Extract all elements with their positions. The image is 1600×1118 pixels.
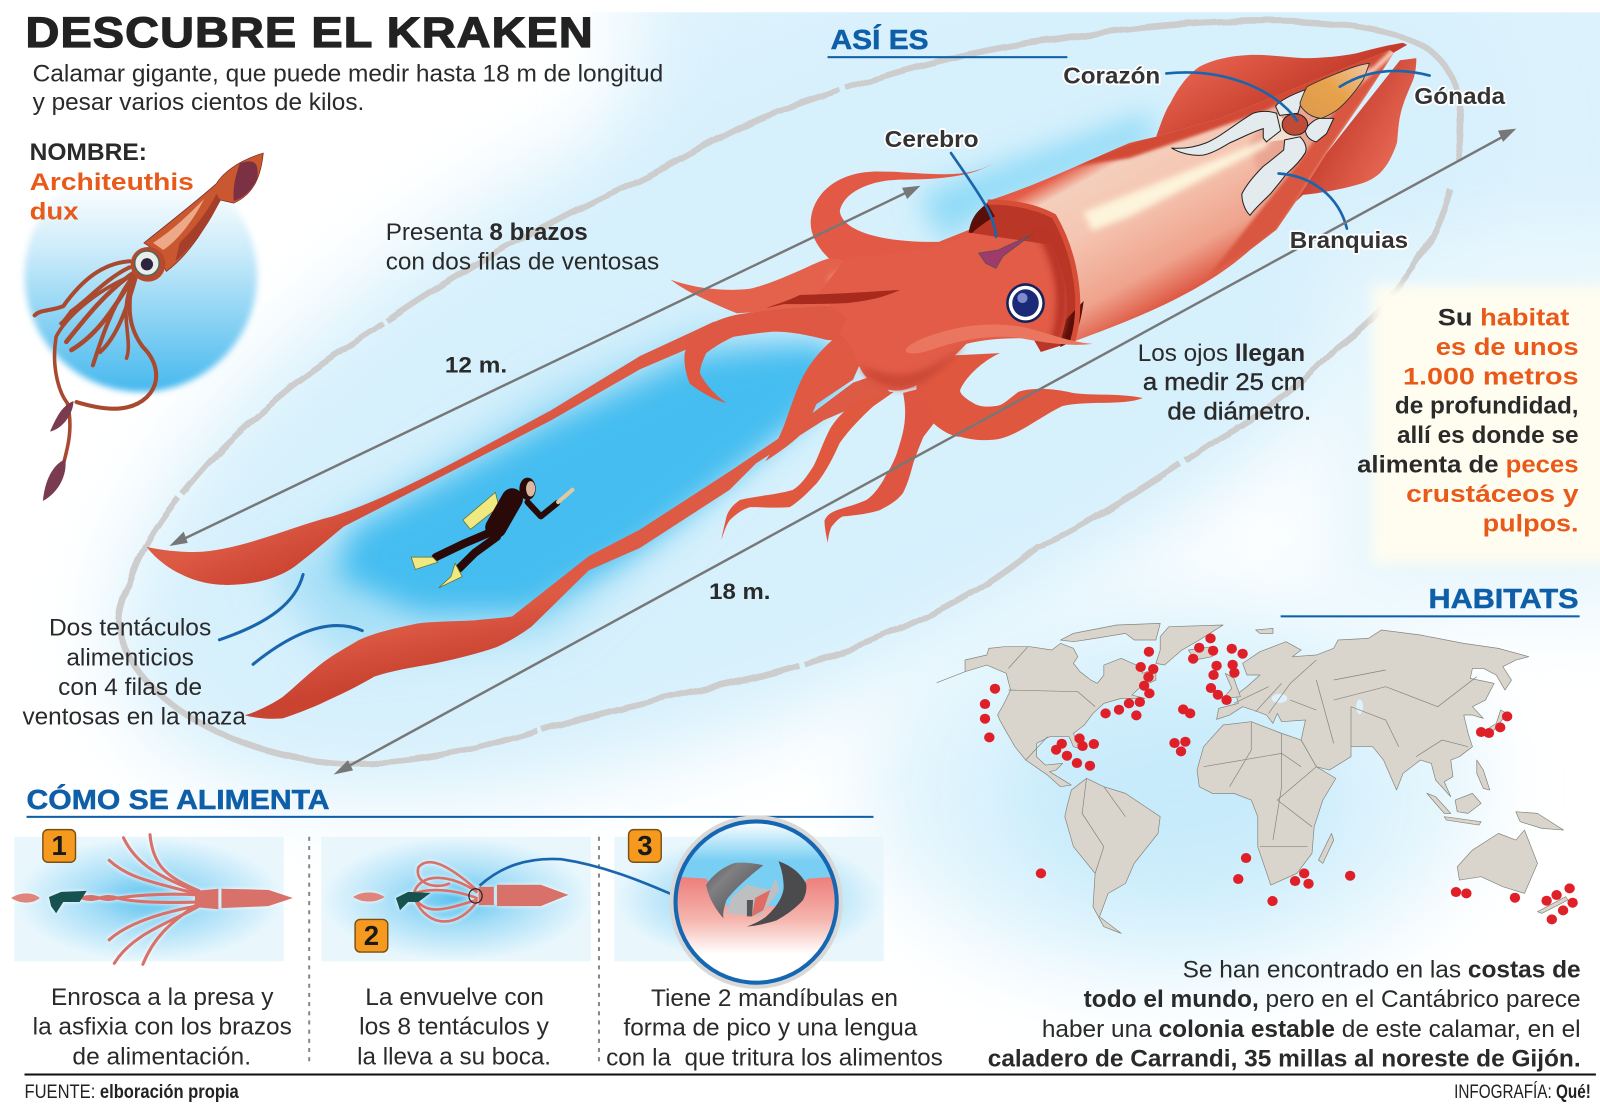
- annotation: arms: [386, 219, 659, 275]
- dotted separators: [309, 837, 599, 1063]
- annotation: eyes: Los ojos llegan: [1138, 340, 1305, 367]
- name block: Architeuthis: [30, 169, 194, 196]
- caption 1: de alimentación.: [72, 1043, 251, 1070]
- annotation: feeding tentacles: [22, 615, 246, 731]
- illustration: small squid: [35, 153, 263, 501]
- habitat text: pulpos.: [1483, 511, 1579, 538]
- annotation: eyes: a medir 25 cm: [1143, 369, 1305, 396]
- badge 2: 2: [364, 920, 379, 951]
- habitat text: Su habitat: [1438, 305, 1569, 332]
- habitat text: alimenta de peces: [1357, 451, 1579, 478]
- world map with sightings: [937, 623, 1578, 933]
- pale box behind habitat text: [1372, 286, 1600, 563]
- mantle cavity: [968, 202, 1077, 352]
- panel 3: background: [614, 837, 884, 961]
- habitat text: allí es donde se: [1397, 422, 1579, 449]
- mantle: [988, 43, 1398, 342]
- caption 1: la asfixia con los brazos: [33, 1014, 292, 1041]
- caption 2: [357, 984, 551, 1070]
- map: inland seas: [1272, 694, 1363, 714]
- caption 3: Tiene 2 mandíbulas en: [651, 985, 898, 1012]
- habitat text: [1357, 305, 1579, 538]
- caption 3: [606, 985, 943, 1071]
- connector to zoom circle: [480, 859, 676, 896]
- panel 2: squid wraps prey: [321, 837, 591, 961]
- arm: below eye: [906, 325, 1093, 353]
- diver: [411, 478, 572, 588]
- panel 1: squid seizes prey: [11, 835, 293, 964]
- brain: [979, 235, 1032, 268]
- measure arrow: 12 m: [169, 186, 920, 546]
- annotation: feeding tentacles: con 4 filas de: [58, 674, 202, 701]
- arm: left pointing: [670, 258, 902, 313]
- mantle highlight: [1084, 129, 1278, 231]
- caption 3: con la que tritura los alimentos: [606, 1044, 943, 1071]
- label: corazón: Corazón: [1063, 63, 1160, 89]
- tentacle: upper with club: [147, 321, 724, 585]
- habitat text: crustáceos y: [1406, 481, 1579, 508]
- caption 1: Enrosca a la presa y: [51, 984, 274, 1011]
- title: DESCUBRE EL KRAKEN: [26, 9, 594, 57]
- name block: NOMBRE:: [30, 139, 147, 166]
- badge 2: [355, 919, 388, 952]
- zoom circle: mandibles: [672, 816, 841, 990]
- annotation: eyes: de diámetro.: [1167, 398, 1311, 425]
- head: [816, 233, 1067, 391]
- heart: [1282, 114, 1308, 135]
- badge 1: [43, 830, 76, 862]
- habitat description: todo el mundo, pero en el Cantábrico parece: [1084, 986, 1581, 1013]
- caption 2: La envuelve con: [365, 984, 544, 1011]
- label: branquias: Branquias: [1290, 227, 1408, 253]
- map: country borders: [1008, 647, 1477, 873]
- mantle rim: [988, 202, 1078, 342]
- fins: [1156, 43, 1416, 209]
- gills: [1171, 90, 1334, 215]
- eye: [1006, 283, 1045, 323]
- annotation: feeding tentacles: alimenticios: [66, 644, 194, 671]
- measure arrow: 18 m: [334, 129, 1516, 775]
- annotation: feeding tentacles: Dos tentáculos: [49, 615, 211, 642]
- blue circle behind small squid: [24, 159, 257, 392]
- arm: curling upward: [811, 163, 993, 291]
- annotation: arms: Presenta 8 brazos: [386, 219, 588, 246]
- arm: right low: [916, 353, 1143, 440]
- name block: [30, 139, 194, 225]
- arm fold: dark crease: [766, 290, 900, 308]
- habitat description: [988, 957, 1581, 1072]
- intro text: y pesar varios cientos de kilos.: [33, 89, 364, 116]
- tentacle: lower with club: [245, 376, 890, 719]
- heading: así es: ASÍ ES: [831, 24, 929, 55]
- label: cerebro: Cerebro: [885, 126, 979, 152]
- annotation: feeding tentacles: ventosas en la maza: [22, 704, 246, 731]
- arm highlight: [829, 270, 878, 289]
- name block: dux: [30, 198, 79, 225]
- habitat description: caladero de Carrandi, 35 millas al noreste de Gijón.: [988, 1045, 1581, 1072]
- source credit: FUENTE: elboración propia: [24, 1081, 239, 1103]
- habitat text: es de unos: [1436, 334, 1579, 361]
- map: red sighting dots: [980, 633, 1578, 924]
- dimension label: 18 m: 18 m.: [709, 579, 770, 604]
- footer rule: [24, 1073, 1596, 1076]
- arm: merging with tentacle: [765, 334, 867, 461]
- intro text: Calamar gigante, que puede medir hasta 18 m de longitud: [33, 61, 663, 88]
- head shadow near collar: [1036, 233, 1068, 342]
- caption 2: los 8 tentáculos y: [359, 1014, 550, 1041]
- head shading: [860, 344, 966, 389]
- habitat text: 1.000 metros: [1403, 364, 1579, 391]
- heading: cómo se alimenta: CÓMO SE ALIMENTA: [27, 784, 330, 815]
- habitat description: haber una colonia estable de este calamar, en el: [1042, 1016, 1581, 1043]
- caption 2: la lleva a su boca.: [357, 1043, 551, 1070]
- badge 3: [629, 830, 661, 862]
- dimension label: 12 m: 12 m.: [445, 352, 507, 377]
- badge 3: 3: [637, 830, 653, 861]
- label: gónada: Gónada: [1414, 83, 1506, 109]
- badge 1: 1: [52, 830, 67, 861]
- arm: curving down: [684, 304, 867, 403]
- gonad: [1300, 63, 1369, 118]
- infographic credit: INFOGRAFÍA: Qué!: [1454, 1080, 1591, 1103]
- leader curves to tentacle clubs: [219, 575, 362, 664]
- caption 3: forma de pico y una lengua: [623, 1015, 918, 1042]
- caption 1: [33, 984, 292, 1070]
- ellipse outline around squid: [118, 21, 1461, 763]
- annotation: arms: con dos filas de ventosas: [386, 248, 659, 275]
- intro text: [33, 61, 663, 116]
- arm: lower left: [721, 392, 894, 540]
- heading: habitats: HABITATS: [1429, 583, 1579, 614]
- habitat description: Se han encontrado en las costas de: [1183, 957, 1581, 984]
- main squid illustration: [147, 43, 1430, 719]
- arm: lower middle: [824, 388, 934, 543]
- dark inner edge: [968, 204, 1084, 347]
- habitat text: de profundidad,: [1395, 392, 1579, 419]
- map: continents: [937, 623, 1568, 933]
- annotation: eyes: [1138, 340, 1311, 425]
- blue leader lines: [951, 71, 1430, 237]
